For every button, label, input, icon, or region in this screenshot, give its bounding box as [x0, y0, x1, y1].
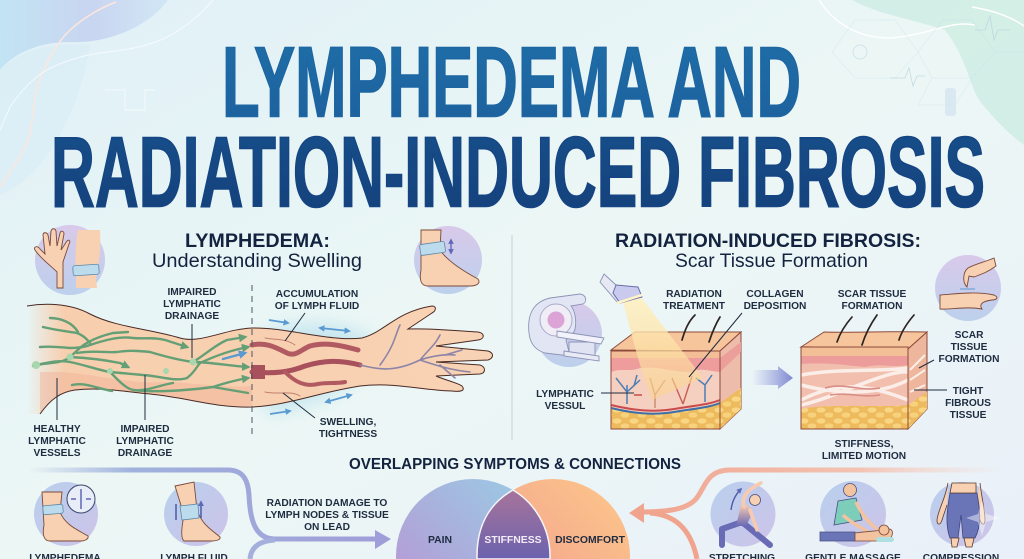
icon: scar pinch	[935, 255, 1001, 321]
label: collagen deposition: COLLAGEN	[746, 289, 804, 300]
label: impaired drainage bottom: IMPAIRED	[120, 424, 170, 435]
venn: overlap	[477, 490, 550, 559]
label: tight fibrous tissue: TIGHT	[953, 386, 984, 397]
label: impaired drainage top: DRAINAGE	[165, 311, 219, 322]
venn: pain	[396, 479, 550, 559]
venn diagram	[396, 479, 630, 559]
arm labels	[28, 287, 377, 459]
lymphedema heading: LYMPHEDEMA:	[185, 230, 330, 252]
leader lines	[57, 313, 315, 420]
radiation beam	[623, 296, 703, 400]
title	[51, 26, 985, 228]
fibrosis labels	[536, 289, 999, 462]
label: radiation treatment: TREATMENT	[663, 301, 726, 312]
block: scar tissue after	[801, 332, 927, 429]
overlap heading: OVERLAPPING SYMPTOMS & CONNECTIONS	[349, 456, 681, 473]
label: lymphatic vessel: LYMPHATIC	[536, 389, 595, 400]
label: scar tissue side: FORMATION	[939, 354, 999, 365]
venn diagram: PAIN	[428, 535, 452, 546]
lymphedema heading: Understanding Swelling	[152, 250, 362, 272]
healthy lymphatic vessels	[32, 318, 248, 393]
icon: radiation machine	[529, 294, 604, 367]
label: scar tissue top: SCAR TISSUE	[838, 289, 906, 300]
label: swelling: SWELLING,	[320, 417, 376, 428]
label: radiation treatment: RADIATION	[666, 289, 722, 300]
label: stiffness: LIMITED MOTION	[822, 451, 906, 462]
damaged vessels	[252, 325, 470, 396]
icon: compression garment	[930, 482, 1000, 547]
label: scar tissue side: TISSUE	[951, 342, 988, 353]
label: impaired drainage top: LYMPHATIC	[163, 299, 222, 310]
label: radiation damage: RADIATION DAMAGE TO	[267, 498, 387, 509]
label: healthy vessels: VESSELS	[34, 448, 81, 459]
icon: ankle band	[414, 226, 482, 294]
label: tight fibrous tissue: TISSUE	[950, 410, 987, 421]
panel: fibrosis	[529, 230, 1001, 462]
label: impaired drainage bottom: LYMPHATIC	[116, 436, 175, 447]
process arrow	[752, 366, 793, 389]
venn diagram: STIFFNESS	[484, 535, 542, 546]
venn diagram: DISCOMFORT	[555, 535, 626, 546]
lymphedema heading	[152, 230, 362, 272]
bottom labels	[29, 553, 999, 559]
fibrosis heading: RADIATION-INDUCED FIBROSIS:	[615, 230, 921, 252]
hair strands and leaders	[601, 313, 947, 393]
label: tight fibrous tissue: FIBROUS	[945, 398, 991, 409]
icon: ankle compression gauge	[34, 482, 98, 546]
label: healthy vessels: LYMPHATIC	[28, 436, 87, 447]
label: swelling: TIGHTNESS	[319, 429, 377, 440]
icon: beam head	[600, 274, 642, 303]
label: healthy vessels: HEALTHY	[33, 424, 81, 435]
fibrosis heading	[615, 230, 921, 272]
label: accumulation: ACCUMULATION	[276, 289, 358, 300]
panel: overlapping symptoms	[28, 456, 1005, 559]
label: impaired drainage bottom: DRAINAGE	[118, 448, 172, 459]
fibrosis heading: Scar Tissue Formation	[675, 250, 868, 272]
label: collagen deposition: DEPOSITION	[744, 301, 806, 312]
icon: lymph fluid ankle	[164, 482, 228, 546]
icon: stretching figure	[710, 482, 776, 546]
label: radiation damage: ON LEAD	[304, 522, 350, 533]
panel: lymphedema	[27, 225, 492, 459]
venn: discomfort	[476, 479, 630, 559]
arm diagram	[27, 304, 492, 415]
arrow: right connector	[629, 470, 1005, 559]
label: lymphatic vessel: VESSUL	[545, 401, 585, 412]
label: radiation damage: LYMPH NODES & TISSUE	[265, 510, 389, 521]
label: accumulation: OF LYMPH FLUID	[275, 301, 359, 312]
arm shape	[27, 304, 492, 414]
arrow: left connector	[28, 470, 391, 559]
label: stiffness: STIFFNESS,	[835, 439, 894, 450]
label: scar tissue side: SCAR	[955, 330, 984, 341]
label: scar tissue top: FORMATION	[842, 301, 902, 312]
icon: hand and leg with band	[34, 225, 105, 295]
icon: gentle massage	[820, 481, 894, 547]
block: skin before	[611, 332, 741, 429]
swelling flow arrows	[269, 320, 351, 414]
label: impaired drainage top: IMPAIRED	[167, 287, 217, 298]
